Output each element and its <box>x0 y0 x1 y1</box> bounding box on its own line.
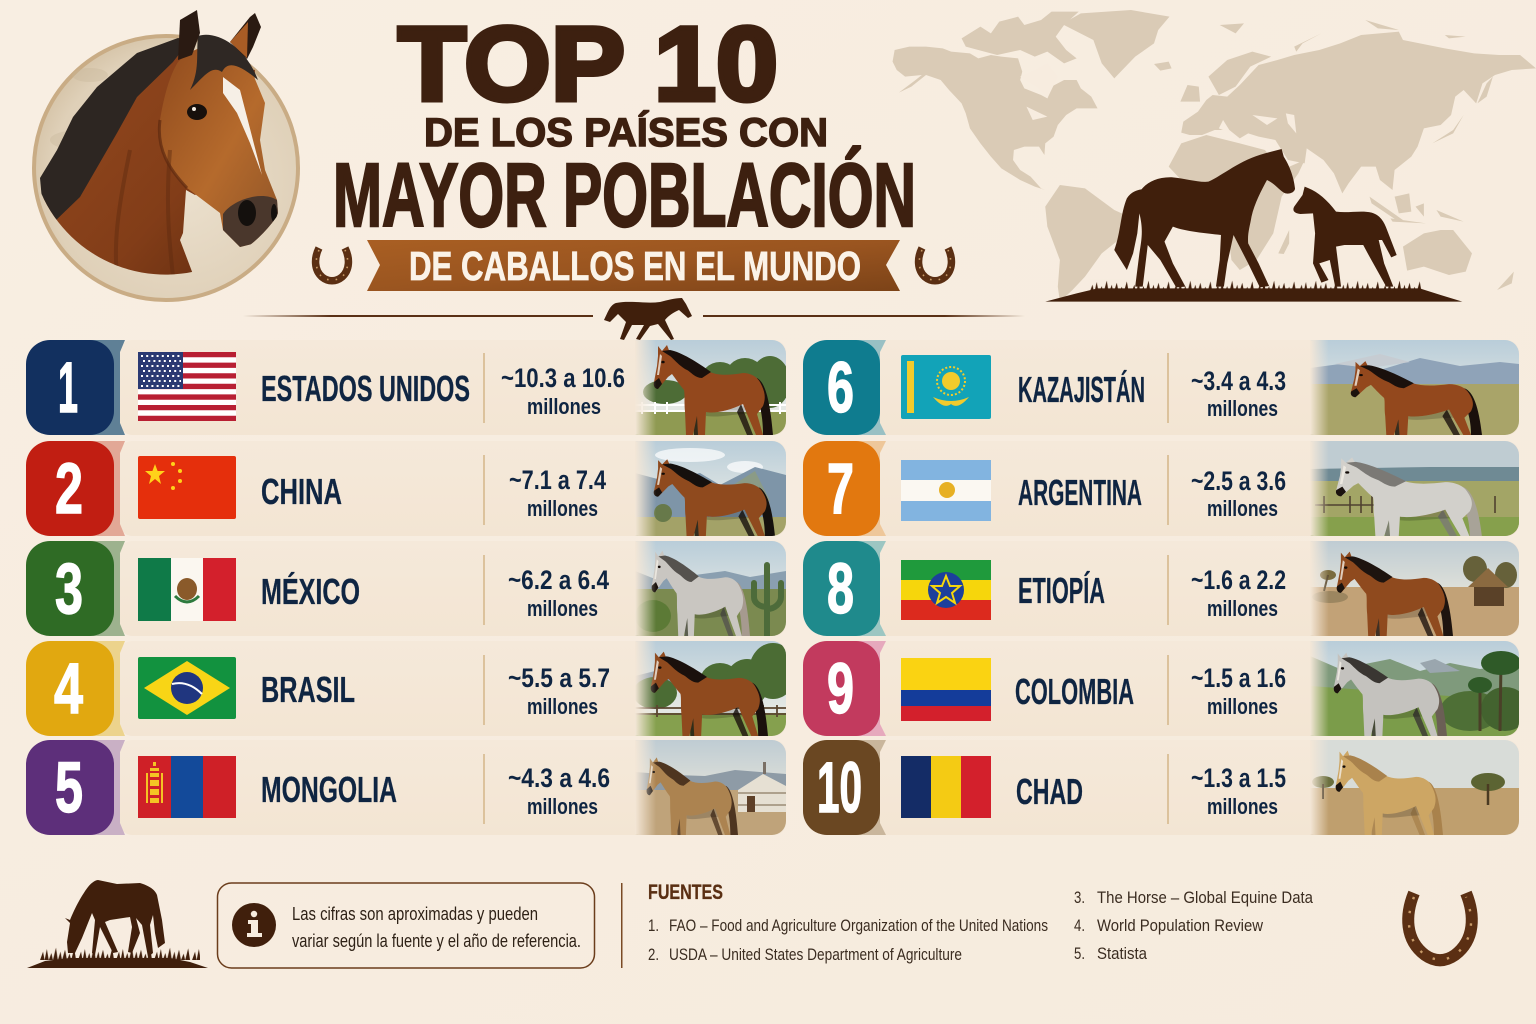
sources heading: FUENTES <box>648 881 723 904</box>
rank badge 10: 10 <box>817 749 862 828</box>
title: mayor población: MAYOR POBLACIÓN <box>333 145 916 246</box>
population value <box>1191 466 1286 521</box>
country name: ESTADOS UNIDOS <box>261 368 470 409</box>
population value: millones <box>527 794 598 819</box>
population value <box>1191 565 1286 621</box>
eye <box>187 104 207 120</box>
population value <box>508 565 609 621</box>
sources list, column 1 <box>648 916 1048 964</box>
population value <box>508 763 610 819</box>
card background <box>875 541 1519 636</box>
country name: BRASIL <box>261 669 355 710</box>
rank badge 1: 1 <box>58 349 78 428</box>
note text: variar según la fuente y el año de referencia. <box>292 931 581 951</box>
divider <box>483 353 485 423</box>
sources list, column 2: 3. <box>1074 888 1085 907</box>
rank badge 3 <box>26 541 125 636</box>
card background <box>875 740 1519 835</box>
card background <box>120 340 786 435</box>
ribbon banner: DE CABALLOS EN EL MUNDO <box>409 243 861 289</box>
sources list, column 2: World Population Review <box>1097 916 1264 935</box>
row 2: China <box>26 441 786 536</box>
photo: bay horse with trees <box>635 641 786 736</box>
flag: Etiopía <box>901 560 991 620</box>
population value <box>509 465 606 521</box>
row 9: Colombia <box>803 641 1529 736</box>
rank badge 1 <box>26 340 125 435</box>
rank badge 2: 2 <box>55 450 83 529</box>
population value: ~1.3 a 1.5 <box>1191 763 1286 793</box>
rank badge 3: 3 <box>55 550 83 629</box>
blaze <box>223 77 262 175</box>
mane <box>40 38 190 223</box>
population value: ~1.6 a 2.2 <box>1191 565 1286 595</box>
divider <box>1167 353 1169 423</box>
card background <box>120 541 786 636</box>
icon: horseshoe right <box>919 248 951 281</box>
photo: bay horse with mountains <box>635 441 786 536</box>
rank badge 10 <box>803 740 886 835</box>
card background <box>120 441 786 536</box>
divider <box>1167 555 1169 625</box>
country name: ETIOPÍA <box>1018 570 1105 611</box>
mare and foal silhouette <box>1045 149 1462 302</box>
country name: MONGOLIA <box>261 769 397 810</box>
divider <box>1167 754 1169 824</box>
population value: millones <box>527 694 598 719</box>
sources list, column 1: FAO – Food and Agriculture Organization of the United Nations <box>669 916 1048 935</box>
population value: ~5.5 a 5.7 <box>508 663 610 693</box>
sources list, column 2: 4. <box>1074 916 1085 935</box>
country name: CHINA <box>261 471 342 512</box>
population value <box>1191 366 1286 421</box>
population value: millones <box>1207 694 1278 719</box>
sources list, column 2: Statista <box>1097 944 1147 963</box>
card background <box>875 441 1519 536</box>
subtitle: de los países con: DE LOS PAÍSES CON <box>424 110 828 155</box>
sources list, column 1: 1. <box>648 916 659 935</box>
icon: horseshoe left <box>316 248 348 281</box>
rank badge 6 <box>803 340 886 435</box>
photo: grey horse on pampas <box>1310 441 1519 536</box>
population value <box>1191 763 1286 819</box>
world map <box>893 10 1536 302</box>
ears <box>178 10 200 60</box>
rank badge 4: 4 <box>54 650 83 729</box>
population value: ~7.1 a 7.4 <box>509 465 606 495</box>
row 3: México <box>26 541 786 636</box>
neck shading <box>114 150 175 274</box>
rank badge 6: 6 <box>827 349 854 428</box>
population value: millones <box>1207 496 1278 521</box>
photo: grey horse with cactus <box>635 541 786 636</box>
flag: Mongolia <box>138 756 236 818</box>
country name: KAZAJISTÁN <box>1018 369 1145 410</box>
photo: bay horse on steppe <box>1310 340 1519 435</box>
row 7: Argentina <box>803 441 1519 537</box>
country name: MÉXICO <box>261 571 360 612</box>
population value: millones <box>527 496 598 521</box>
divider <box>1167 455 1169 525</box>
population value: ~2.5 a 3.6 <box>1191 466 1286 496</box>
population value: ~6.2 a 6.4 <box>508 565 609 595</box>
info note box <box>218 883 594 968</box>
sources list, column 1: 2. <box>648 945 659 964</box>
population value: ~10.3 a 10.6 <box>501 363 625 393</box>
footer divider <box>621 883 622 968</box>
portrait medallion: horse head <box>33 10 299 301</box>
flag: Colombia <box>901 658 991 721</box>
divider <box>483 455 485 525</box>
population value: ~4.3 a 4.6 <box>508 763 610 793</box>
population value <box>508 663 610 719</box>
rank badge 7: 7 <box>827 450 854 529</box>
row 1: Estados Unidos <box>26 340 790 435</box>
icon: info <box>232 903 276 947</box>
icon: large horseshoe <box>1408 893 1472 960</box>
row 10: Chad <box>803 740 1519 835</box>
grazing horse silhouette <box>27 880 208 968</box>
population value <box>501 363 625 419</box>
flag: USA <box>138 352 236 421</box>
row 6: Kazajistán <box>803 340 1519 435</box>
population value: ~1.5 a 1.6 <box>1191 663 1286 693</box>
population value <box>1191 663 1286 719</box>
card background <box>875 641 1519 736</box>
photo: grey horse with palms <box>1310 641 1519 736</box>
photo: buckskin horse with yurt <box>636 740 786 835</box>
population value: millones <box>527 596 598 621</box>
rank badge 7 <box>803 441 886 536</box>
flag: México <box>138 558 236 621</box>
note text: Las cifras son aproximadas y pueden <box>292 904 538 924</box>
sources list, column 2: The Horse – Global Equine Data <box>1097 888 1313 907</box>
rank badge 8 <box>803 541 886 636</box>
rank badge 8: 8 <box>827 550 854 629</box>
country name: ARGENTINA <box>1018 472 1142 513</box>
divider <box>483 655 485 725</box>
population value: millones <box>1207 596 1278 621</box>
population value: millones <box>1207 794 1278 819</box>
sources list, column 2: 5. <box>1074 944 1085 963</box>
population value: ~3.4 a 4.3 <box>1191 366 1286 396</box>
rank badge 9: 9 <box>827 650 854 729</box>
row 8: Etiopía <box>803 541 1519 636</box>
row 5: Mongolia <box>26 740 786 835</box>
card background <box>120 641 786 736</box>
divider <box>483 754 485 824</box>
flag: Brasil <box>138 657 236 719</box>
population value: millones <box>527 394 601 419</box>
flag: Chad <box>901 756 991 818</box>
muzzle <box>223 196 278 247</box>
country name: CHAD <box>1016 771 1083 812</box>
population value: millones <box>1207 396 1278 421</box>
row 4: Brasil <box>26 641 797 736</box>
sources list, column 2 <box>1074 888 1313 963</box>
flag: Kazajistán <box>901 355 991 419</box>
rank badge 4 <box>26 641 125 736</box>
rank badge 2 <box>26 441 125 536</box>
neck <box>42 55 255 298</box>
flag: Argentina <box>901 460 991 521</box>
card background <box>875 340 1519 435</box>
divider <box>483 555 485 625</box>
rank badge 5 <box>26 740 125 835</box>
rank badge 9 <box>803 641 886 736</box>
photo: bay horse with hut <box>1310 541 1519 636</box>
sources list, column 1: USDA – United States Department of Agriculture <box>669 945 962 964</box>
country name: COLOMBIA <box>1015 671 1134 712</box>
note text <box>292 904 581 951</box>
title: Top 10: TOP 10 <box>398 6 778 123</box>
flag: China <box>138 456 236 519</box>
divider <box>1167 655 1169 725</box>
card background <box>120 740 786 835</box>
rank badge 5: 5 <box>55 749 83 828</box>
head <box>159 44 278 247</box>
photo: buckskin horse on savanna <box>1310 740 1519 835</box>
divider with running horse <box>243 298 1025 340</box>
photo: bay horse with white fence <box>635 340 786 435</box>
